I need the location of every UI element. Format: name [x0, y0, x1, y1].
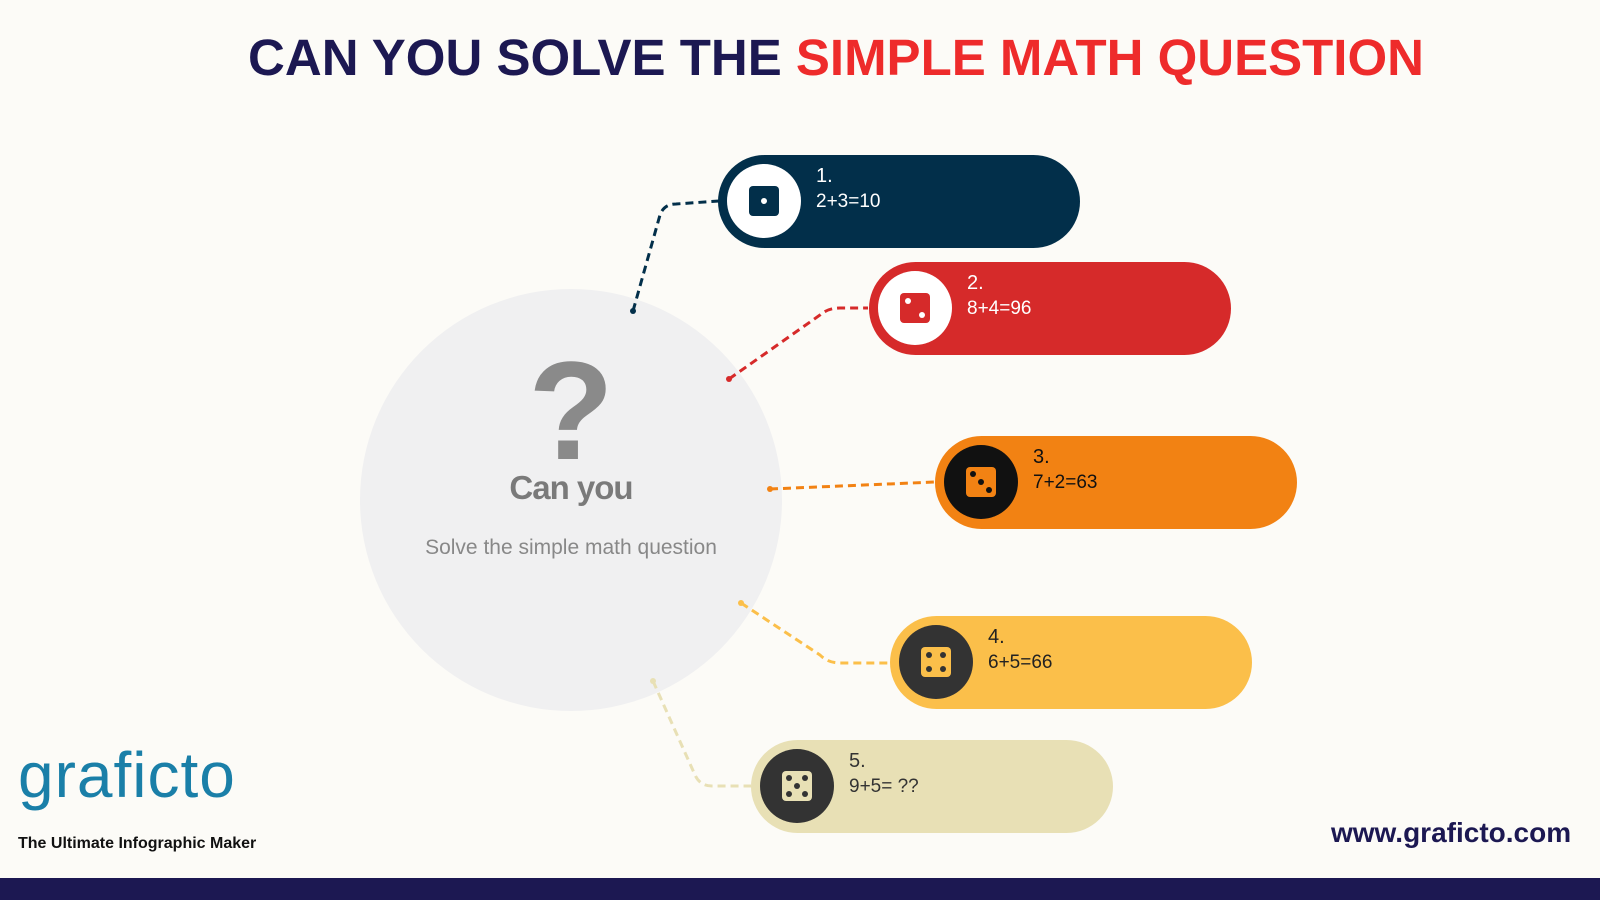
pill 4: 4. [988, 626, 1005, 648]
subtext: Solve the simple math question [425, 536, 717, 559]
pill 4: 6+5=66 [988, 652, 1052, 673]
website: www.graficto.com [1331, 817, 1571, 848]
pill 3: 7+2=63 [1033, 472, 1097, 493]
pill 1: 2+3=10 [816, 191, 880, 212]
icon: question mark: ? [528, 332, 614, 489]
icon: die four [899, 625, 973, 699]
title: CAN YOU SOLVE THE SIMPLE MATH QUESTION [248, 29, 1424, 86]
icon: die two [878, 271, 952, 345]
pill 2 [869, 262, 1231, 355]
pill 4 [890, 616, 1252, 709]
logo: graficto [18, 739, 236, 811]
pill 2: 8+4=96 [967, 298, 1031, 319]
heading: can you: Can you [509, 469, 633, 506]
pill 3: 3. [1033, 446, 1050, 468]
bottom bar [0, 878, 1600, 900]
pill 1: 1. [816, 165, 833, 187]
icon: die five [760, 749, 834, 823]
logo [18, 739, 256, 852]
pill 5: 5. [849, 750, 866, 772]
pill 5: 9+5= ?? [849, 776, 919, 797]
logo: The Ultimate Infographic Maker [18, 835, 256, 852]
central circle [360, 289, 782, 711]
pill 3 [935, 436, 1297, 529]
pill 5 [751, 740, 1113, 833]
pill 2: 2. [967, 272, 984, 294]
icon: die three [944, 445, 1018, 519]
pill 1 [718, 155, 1080, 248]
icon: die one [727, 164, 801, 238]
